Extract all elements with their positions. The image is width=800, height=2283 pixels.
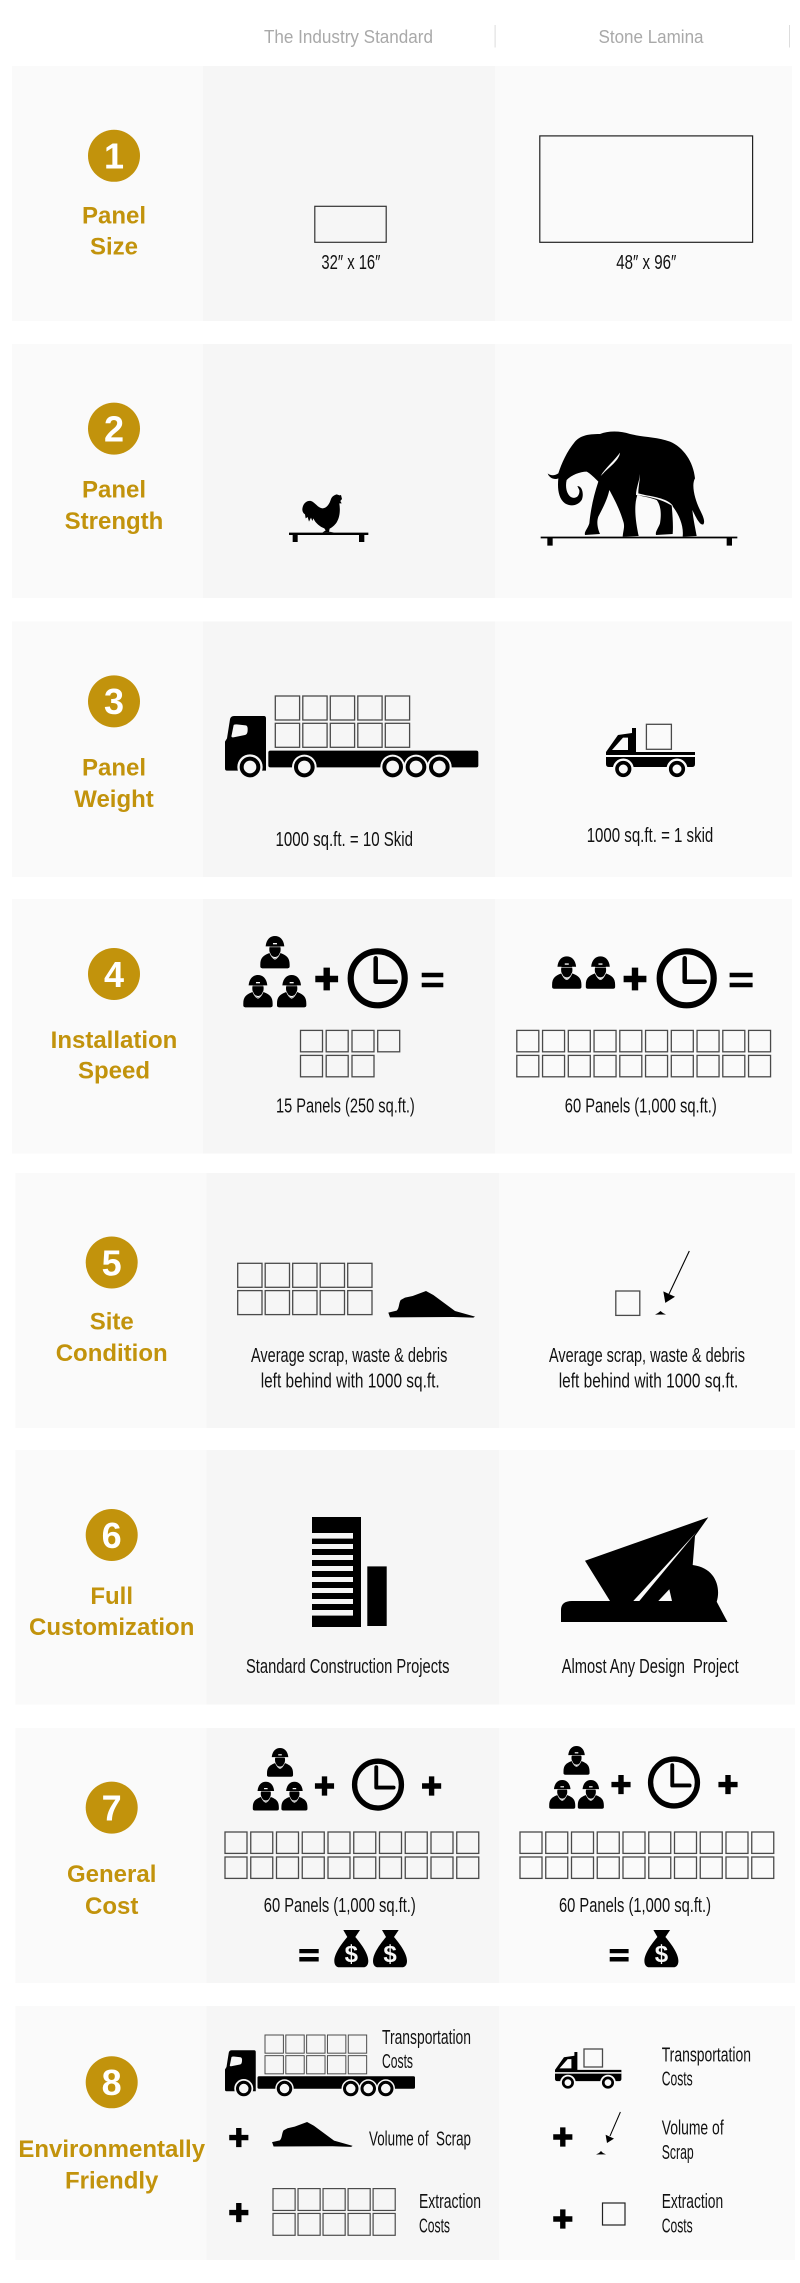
label: extraction costs: Costs [662, 2215, 693, 2237]
icon: scrap pile [272, 2122, 353, 2147]
panel: 8 environmentally friendly [15, 2006, 795, 2260]
label: almost any design: Almost Any Design Project [562, 1656, 739, 1678]
badge 4: 4 [104, 954, 124, 995]
heading: Site Condition: Condition [56, 1340, 168, 1367]
panels: 20 boxes [225, 1832, 479, 1878]
icon: large truck with ten skids [225, 696, 478, 780]
icon: hand plane [561, 1517, 728, 1622]
label: extraction costs [662, 2191, 723, 2237]
badge 2 [88, 403, 140, 455]
heading: Panel Size [82, 202, 146, 260]
badge 5 [86, 1236, 138, 1288]
panel: 2 panel strength [12, 344, 792, 598]
heading: Full Customization: Customization [29, 1614, 194, 1641]
badge 3: 3 [104, 681, 124, 722]
panel box single [602, 2203, 625, 2225]
label: volume of scrap [662, 2118, 724, 2164]
heading: Environmentally Friendly: Environmentally [18, 2136, 206, 2163]
arrow pointing at tiny scrap [663, 1251, 689, 1303]
result: one money bag: $ [655, 1941, 669, 1968]
icon: rooster on shelf [289, 494, 368, 542]
heading: Installation Speed [51, 1027, 177, 1085]
heading: Panel Weight: Weight [74, 786, 154, 813]
heading: Panel Weight: Panel [82, 755, 146, 782]
badge 1 [88, 130, 140, 182]
heading: Panel Weight [74, 755, 154, 813]
label: volume of scrap: Volume of Scrap [369, 2128, 471, 2150]
label: 1 skid: 1000 sq.ft. = 1 skid [587, 825, 713, 847]
panel: 5 site condition [15, 1173, 795, 1428]
heading: Panel Strength: Strength [65, 508, 163, 535]
plus sign [229, 2128, 248, 2147]
label: transportation costs [382, 2027, 471, 2073]
plus sign [553, 2127, 572, 2147]
equation: workers plus time plus, standard [253, 1748, 441, 1811]
badge 7: 7 [102, 1787, 122, 1828]
panels: 20 boxes [517, 1030, 771, 1077]
badge 2: 2 [104, 408, 124, 449]
small panel rectangle [315, 206, 386, 242]
panel: 1 panel size [12, 66, 792, 321]
panel: 3 panel weight [12, 622, 792, 877]
result: two money bags: $ [383, 1941, 397, 1968]
heading: Site Condition [56, 1309, 168, 1367]
plus sign [229, 2203, 248, 2222]
heading: Installation Speed: Speed [78, 1058, 150, 1085]
badge 8 [86, 2056, 138, 2108]
panels: 10 boxes [238, 1263, 372, 1315]
heading: Panel Strength: Panel [82, 476, 146, 504]
label: extraction costs: Costs [419, 2215, 450, 2237]
large panel rectangle [540, 136, 753, 242]
badge 3 [88, 675, 140, 727]
label: scrap left behind, standard: left behind with 1000 sq.ft. [261, 1370, 440, 1392]
label: 15 panels: 15 Panels (250 sq.ft.) [276, 1096, 415, 1118]
heading: Site Condition: Site [90, 1309, 134, 1336]
equation: workers plus time plus, lamina [549, 1746, 738, 1809]
icon: scrap pile [388, 1291, 475, 1318]
label: scrap left behind, lamina [549, 1345, 745, 1392]
label: transportation costs: Costs [662, 2068, 693, 2090]
result: two money bags [299, 1930, 407, 1968]
icon: small truck with one skid [606, 724, 695, 780]
heading: Panel Size: Panel [82, 202, 146, 230]
icon: elephant on shelf [541, 431, 737, 546]
header: The Industry Standard: The Industry Standard [264, 27, 433, 47]
heading: Panel Strength [65, 476, 163, 535]
badge 8: 8 [102, 2062, 122, 2103]
label: volume of scrap: Scrap [662, 2142, 694, 2164]
heading: Full Customization: Full [90, 1583, 133, 1610]
label: transportation costs [662, 2044, 751, 2090]
badge 5: 5 [102, 1242, 122, 1283]
label: extraction costs: Extraction [662, 2191, 723, 2213]
heading: General Cost [67, 1861, 156, 1920]
label: volume of scrap: Volume of [662, 2118, 724, 2140]
equation: three workers plus time equals [243, 936, 443, 1007]
panels: 10 boxes [273, 2189, 395, 2235]
badge 4 [88, 948, 140, 1000]
column headers [264, 25, 790, 48]
label: 60 panels: 60 Panels (1,000 sq.ft.) [565, 1096, 717, 1118]
icon: large truck with skids [225, 2035, 415, 2098]
label: 48 x 96: 48″ x 96″ [616, 252, 676, 274]
label: transportation costs: Costs [382, 2051, 413, 2073]
label: 10 skids: 1000 sq.ft. = 10 Skid [276, 829, 413, 851]
label: transportation costs: Transportation [382, 2027, 471, 2049]
heading: Environmentally Friendly: Friendly [65, 2168, 159, 2195]
panels: 20 boxes [520, 1832, 774, 1878]
label: transportation costs: Transportation [662, 2044, 751, 2066]
icon: buildings [312, 1517, 387, 1627]
heading: Full Customization [29, 1583, 194, 1641]
panel: 7 general cost [15, 1728, 795, 1983]
label: scrap left behind, lamina: left behind with 1000 sq.ft. [559, 1370, 738, 1392]
label: 60 panels: 60 Panels (1,000 sq.ft.) [264, 1895, 416, 1917]
label: scrap left behind, standard: Average scrap, waste & debris [251, 1345, 447, 1367]
badge 1: 1 [104, 136, 124, 177]
heading: Installation Speed: Installation [51, 1027, 177, 1054]
icon: tiny scrap pile [655, 1311, 666, 1315]
label: 60 panels: 60 Panels (1,000 sq.ft.) [559, 1895, 711, 1917]
heading: Environmentally Friendly [18, 2136, 206, 2195]
arrow pointing at tiny scrap [606, 2112, 620, 2143]
icon: small truck with skid [555, 2049, 621, 2090]
result: two money bags: $ [345, 1941, 359, 1968]
heading: General Cost: Cost [85, 1893, 138, 1920]
badge 6 [86, 1509, 138, 1561]
plus sign [553, 2209, 572, 2229]
equation: two workers plus time equals [552, 951, 753, 1005]
result: one money bag [610, 1930, 678, 1968]
icon: tiny scrap pile [596, 2151, 606, 2154]
label: standard construction: Standard Construction Projects [246, 1656, 450, 1678]
header: Stone Lamina: Stone Lamina [598, 27, 704, 47]
panel box single [616, 1291, 640, 1315]
heading: Panel Size: Size [90, 234, 138, 260]
panel: 4 installation speed [12, 899, 792, 1154]
label: extraction costs [419, 2191, 481, 2237]
badge 6: 6 [102, 1515, 122, 1556]
panel: 6 full customization [15, 1450, 795, 1705]
label: extraction costs: Extraction [419, 2191, 481, 2213]
label: scrap left behind, standard [251, 1345, 447, 1392]
heading: General Cost: General [67, 1861, 156, 1888]
panels: 7 boxes [300, 1030, 400, 1077]
badge 7 [86, 1782, 138, 1834]
label: 32 x 16: 32″ x 16″ [321, 252, 380, 274]
